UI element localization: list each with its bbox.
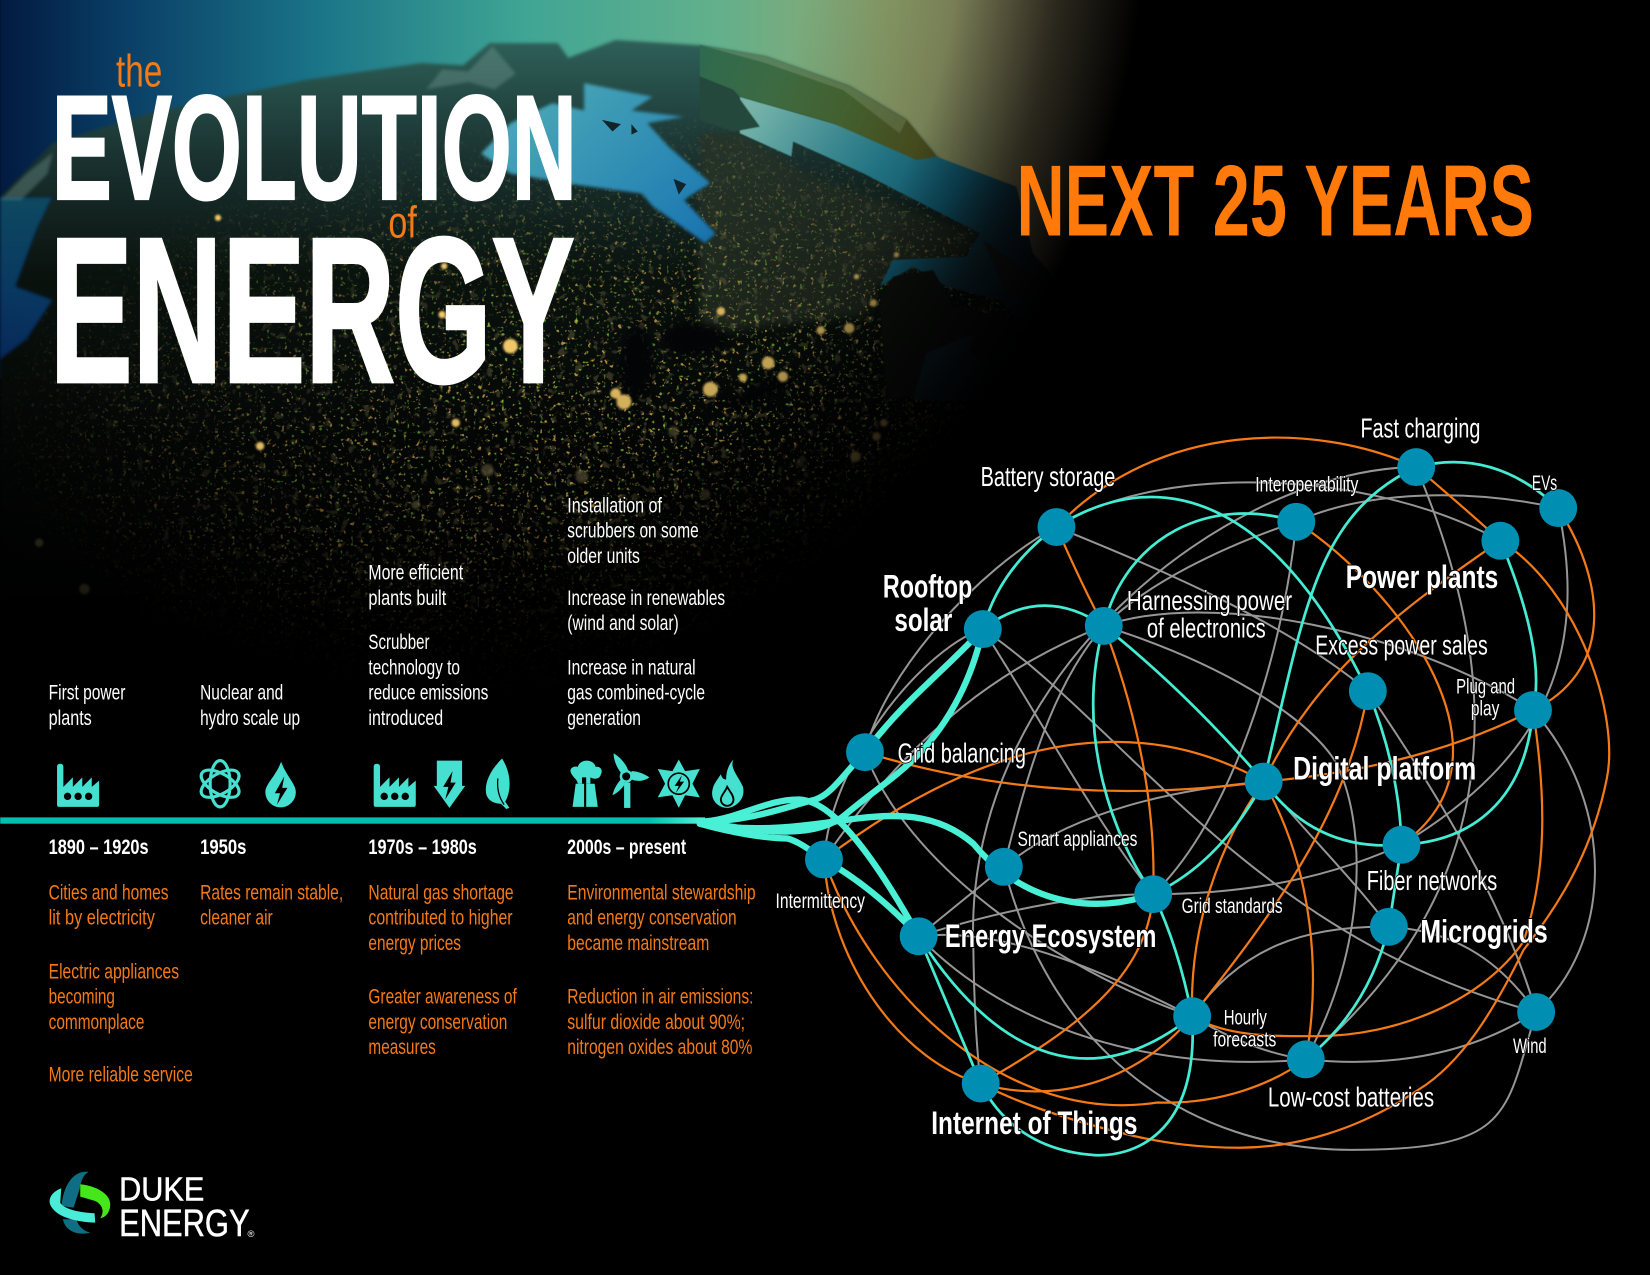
milestone text: More efficient bbox=[368, 562, 463, 585]
icon: down arrow with bolt bbox=[434, 761, 465, 808]
node labels: Power plants bbox=[1346, 558, 1498, 595]
impact text bbox=[368, 881, 517, 1059]
impact text bbox=[200, 881, 343, 930]
timeline era 1970s-1980s bbox=[368, 562, 517, 1059]
node labels bbox=[776, 413, 1557, 1141]
milestone text bbox=[200, 682, 300, 730]
milestone text: Increase in natural bbox=[567, 656, 696, 679]
node labels: Rooftop bbox=[883, 568, 972, 605]
logo wordmark bbox=[119, 1171, 254, 1245]
impact text: energy prices bbox=[368, 932, 461, 955]
timeline era 2000s-present bbox=[567, 494, 756, 1059]
icon: sun with bolt bbox=[658, 760, 700, 808]
icon: gas flame bbox=[712, 760, 743, 808]
node labels: forecasts bbox=[1213, 1029, 1276, 1052]
milestone text: Increase in renewables bbox=[567, 587, 725, 610]
impact text: and energy conservation bbox=[567, 907, 737, 930]
timeline era 1890-1920s bbox=[49, 682, 193, 1086]
network chart bbox=[700, 413, 1609, 1155]
impact text: nitrogen oxides about 80% bbox=[567, 1036, 752, 1059]
icon: factory bbox=[57, 764, 99, 807]
milestone text: introduced bbox=[368, 707, 443, 730]
node labels: Digital platform bbox=[1293, 750, 1476, 787]
icon: water drop with bolt bbox=[265, 762, 296, 807]
logo wordmark: ® bbox=[247, 1229, 254, 1240]
node labels: Excess power sales bbox=[1315, 629, 1488, 660]
node labels: Harnessing power bbox=[1127, 585, 1292, 616]
milestone text: older units bbox=[567, 545, 640, 568]
gray connections bbox=[824, 467, 1595, 1150]
date: 1950s bbox=[200, 836, 246, 859]
impact text: becoming bbox=[49, 986, 115, 1009]
impact text: cleaner air bbox=[200, 907, 273, 930]
logo wordmark: ENERGY bbox=[119, 1203, 250, 1245]
date: 1970s – 1980s bbox=[368, 836, 477, 859]
node labels: Fiber networks bbox=[1367, 865, 1497, 896]
date: 2000s – present bbox=[567, 836, 686, 859]
node labels: Fast charging bbox=[1360, 413, 1480, 444]
impact text: Cities and homes bbox=[49, 881, 169, 904]
milestone text: hydro scale up bbox=[200, 707, 300, 730]
milestone text: Installation of bbox=[567, 494, 662, 517]
logo wordmark: DUKE bbox=[119, 1171, 204, 1208]
node labels: Internet of Things bbox=[931, 1104, 1137, 1141]
node labels: Grid balancing bbox=[898, 738, 1026, 769]
timeline trunk bbox=[0, 817, 705, 824]
node labels: solar bbox=[894, 601, 953, 638]
icon: factory bbox=[374, 764, 416, 807]
milestone text: plants built bbox=[368, 587, 446, 610]
impact text: energy conservation bbox=[368, 1011, 507, 1034]
node labels: Grid standards bbox=[1182, 895, 1283, 918]
network nodes bbox=[805, 448, 1577, 1102]
date: 1890 – 1920s bbox=[49, 836, 149, 859]
orange connections bbox=[824, 438, 1609, 1148]
milestone text: plants bbox=[49, 707, 92, 730]
node labels: Plug and bbox=[1456, 675, 1515, 698]
impact text: Rates remain stable, bbox=[200, 881, 343, 904]
logo mark bbox=[50, 1172, 110, 1234]
node labels: Wind bbox=[1513, 1035, 1547, 1058]
impact text: became mainstream bbox=[567, 932, 709, 955]
node labels: Intermittency bbox=[776, 890, 865, 913]
milestone text bbox=[567, 494, 725, 730]
icon: wind turbine bbox=[612, 753, 649, 808]
thin teal connections bbox=[919, 462, 1558, 1155]
node labels: EVs bbox=[1532, 472, 1557, 495]
logo: Duke Energy bbox=[50, 1171, 254, 1245]
node labels: Microgrids bbox=[1420, 913, 1548, 950]
thick teal branches from timeline bbox=[700, 629, 1153, 936]
impact text: sulfur dioxide about 90%; bbox=[567, 1011, 745, 1034]
milestone text: reduce emissions bbox=[368, 682, 488, 705]
title word: the: the bbox=[116, 45, 162, 96]
milestone text bbox=[368, 562, 488, 730]
title bbox=[50, 45, 577, 426]
milestone text: Nuclear and bbox=[200, 682, 283, 705]
impact text: contributed to higher bbox=[368, 907, 513, 930]
impact text: Environmental stewardship bbox=[567, 881, 756, 904]
milestone text: scrubbers on some bbox=[567, 520, 699, 543]
impact text: Electric appliances bbox=[49, 960, 179, 983]
title word: of: of bbox=[388, 199, 417, 248]
node labels: Low-cost batteries bbox=[1268, 1082, 1434, 1113]
node labels: Energy Ecosystem bbox=[945, 917, 1156, 954]
impact text: Reduction in air emissions: bbox=[567, 986, 753, 1009]
impact text: Greater awareness of bbox=[368, 986, 517, 1009]
node labels: Interoperability bbox=[1255, 473, 1359, 496]
milestone text: technology to bbox=[368, 656, 460, 679]
impact text bbox=[49, 881, 193, 1086]
impact text: lit by electricity bbox=[49, 907, 155, 930]
icon: leaf bbox=[486, 758, 510, 809]
impact text: commonplace bbox=[49, 1011, 144, 1034]
milestone text: generation bbox=[567, 707, 641, 730]
milestone text bbox=[49, 682, 125, 730]
milestone text: gas combined-cycle bbox=[567, 682, 705, 705]
milestone text: Scrubber bbox=[368, 631, 429, 654]
title word: ENERGY: ENERGY bbox=[50, 194, 575, 426]
icon: atom bbox=[197, 761, 243, 807]
earth photo background bbox=[0, 0, 1650, 842]
node labels: play bbox=[1471, 697, 1500, 720]
icon: cooling towers with cloud bbox=[570, 761, 602, 807]
node labels: Hourly bbox=[1224, 1007, 1267, 1030]
impact text: measures bbox=[368, 1036, 436, 1059]
milestone text: First power bbox=[49, 682, 125, 705]
impact text: More reliable service bbox=[49, 1063, 193, 1086]
title word: EVOLUTION: EVOLUTION bbox=[52, 66, 577, 231]
impact text: Natural gas shortage bbox=[368, 881, 514, 904]
milestone text: (wind and solar) bbox=[567, 612, 679, 635]
impact text bbox=[567, 881, 756, 1059]
timeline era 1950s bbox=[197, 682, 343, 930]
node labels: Battery storage bbox=[981, 461, 1115, 492]
node labels: of electronics bbox=[1147, 612, 1266, 643]
node labels: Smart appliances bbox=[1018, 828, 1137, 851]
